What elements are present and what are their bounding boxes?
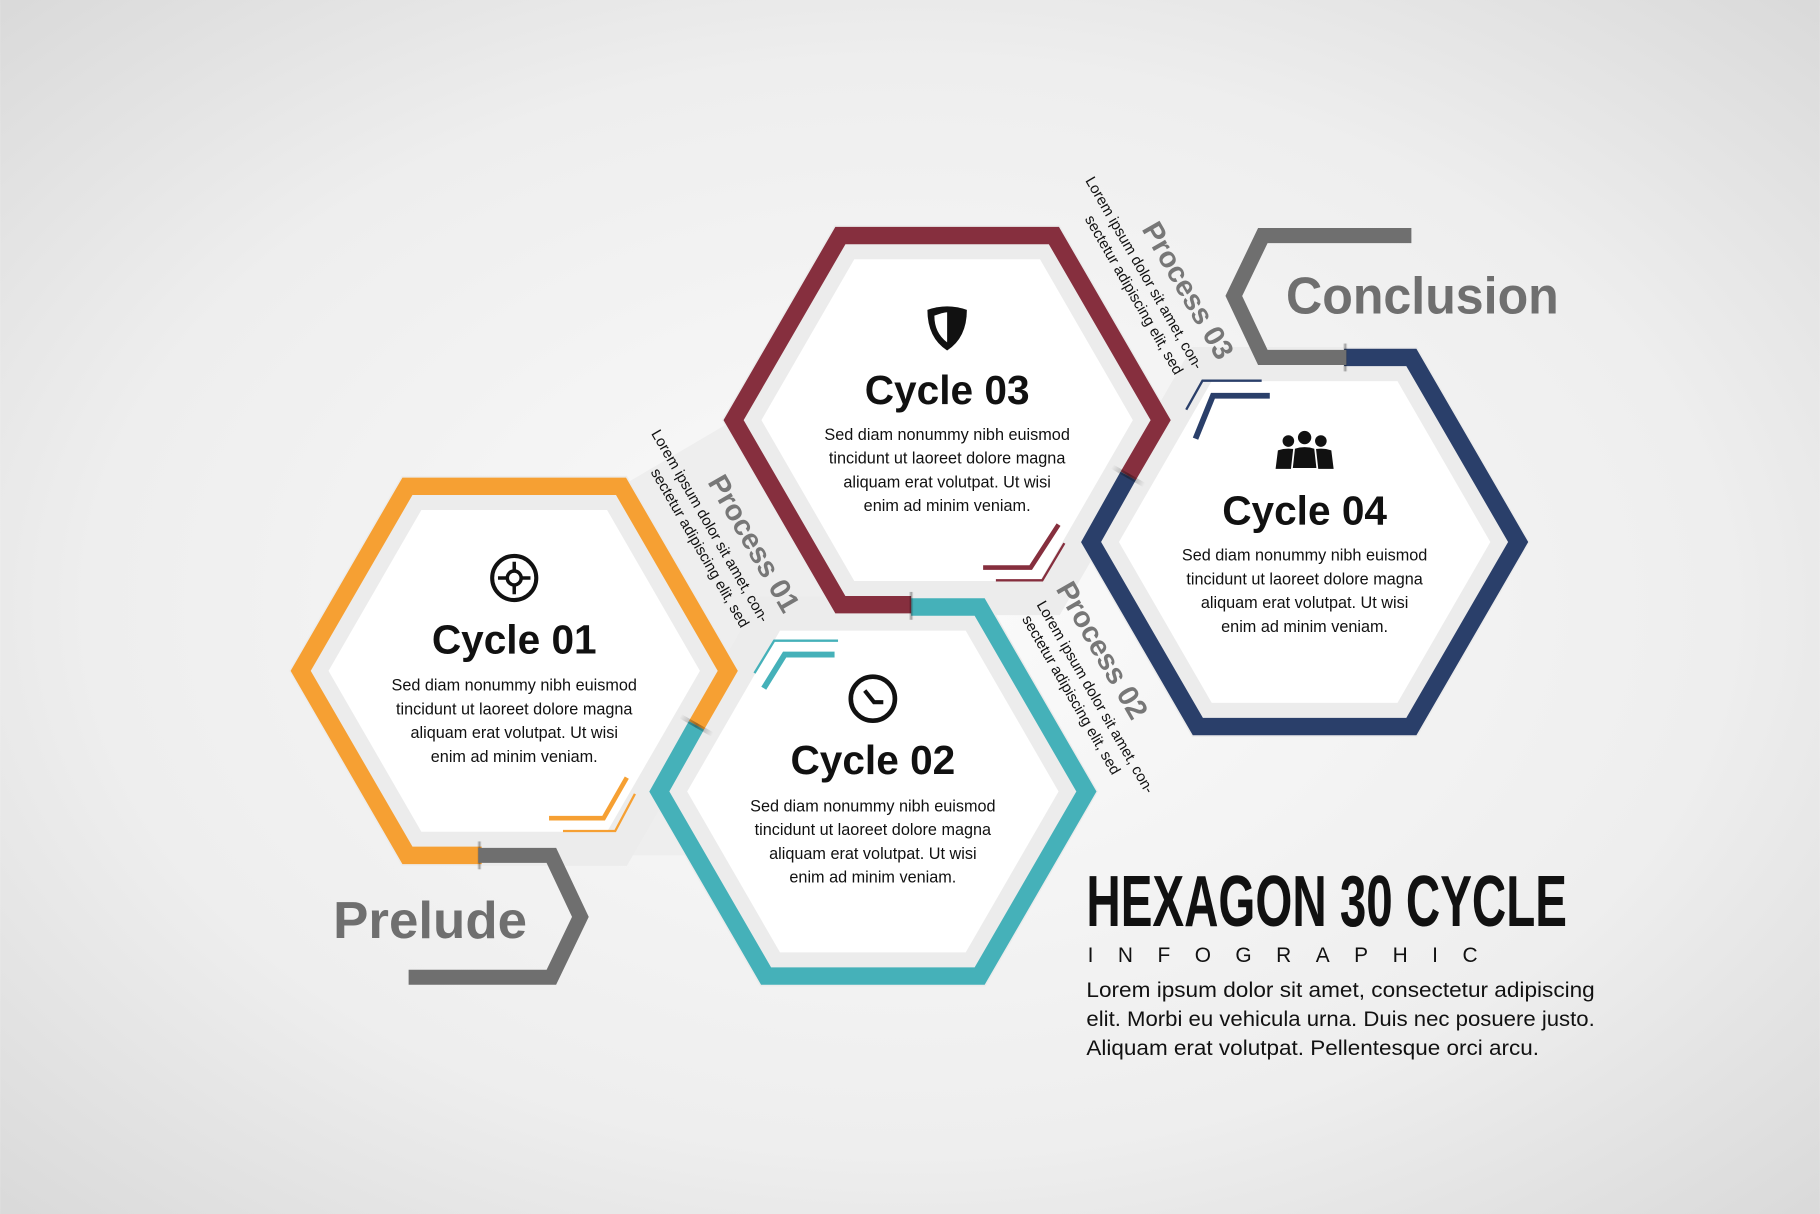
title block: elit. Morbi eu vehicula urna. Duis nec posuere justo. xyxy=(1086,1007,1595,1031)
label: process 02: sectetur adipiscing elit, sed xyxy=(1018,612,1124,778)
label: process 02: Process 02 xyxy=(1049,576,1154,725)
content: cycle 02 xyxy=(750,677,996,887)
content: cycle 01: enim ad minim veniam. xyxy=(431,748,598,766)
icon: shield xyxy=(927,306,967,351)
content: cycle 01: tincidunt ut laoreet dolore magna xyxy=(396,700,633,718)
content: cycle 03 xyxy=(824,306,1070,515)
icon: compass xyxy=(492,556,536,600)
junction shadows xyxy=(477,344,1348,869)
content: cycle 01: aliquam erat volutpat. Ut wisi xyxy=(410,724,618,742)
label: process 03: sectetur adipiscing elit, sed xyxy=(1081,212,1186,378)
bracket: prelude xyxy=(333,855,580,977)
content: cycle 04: Sed diam nonummy nibh euismod xyxy=(1182,547,1427,565)
bracket: conclusion: Conclusion xyxy=(1286,267,1559,325)
content: cycle 01: Cycle 01 xyxy=(432,616,597,662)
content: cycle 03: Sed diam nonummy nibh euismod xyxy=(824,426,1070,444)
content: cycle 02: tincidunt ut laoreet dolore magna xyxy=(755,821,992,839)
content: cycle 03: enim ad minim veniam. xyxy=(864,497,1031,515)
content: cycle 03: aliquam erat volutpat. Ut wisi xyxy=(843,473,1051,491)
content: cycle 01: Sed diam nonummy nibh euismod xyxy=(392,677,637,695)
content: cycle 04: tincidunt ut laoreet dolore magna xyxy=(1186,570,1424,588)
label: process 02 xyxy=(1014,576,1189,806)
label: process 01 xyxy=(630,409,805,639)
gap fills xyxy=(621,357,1198,855)
title block: INFOGRAPHIC xyxy=(1088,944,1478,967)
content: cycle 02: Sed diam nonummy nibh euismod xyxy=(750,797,996,815)
content: cycle 04: Cycle 04 xyxy=(1222,488,1387,534)
title block: Aliquam erat volutpat. Pellentesque orci arcu. xyxy=(1086,1036,1539,1060)
icon: people xyxy=(1276,430,1334,469)
bracket: conclusion xyxy=(1234,236,1559,357)
content: cycle 04: aliquam erat volutpat. Ut wisi xyxy=(1201,594,1408,612)
label: process 02: Lorem ipsum dolor sit amet, con- xyxy=(1033,598,1157,797)
label: process 03 xyxy=(1064,156,1239,386)
content: cycle 01 xyxy=(392,556,637,766)
hexagon stroke: cycle 03 xyxy=(734,236,1161,605)
hexagon halos xyxy=(289,225,1530,987)
icon: clock xyxy=(851,677,895,721)
content: cycle 03: Cycle 03 xyxy=(865,367,1030,413)
accent lines xyxy=(549,381,1270,831)
hexagon stroke: cycle 01 xyxy=(301,486,728,855)
label: process 01: Lorem ipsum dolor sit amet, con- xyxy=(647,427,772,625)
hexagon stroke: cycle 02 xyxy=(659,607,1086,976)
label: process 03: Process 03 xyxy=(1135,217,1239,365)
label: process 03: Lorem ipsum dolor sit amet, con- xyxy=(1081,174,1206,372)
title block: HEXAGON 30 CYCLE xyxy=(1086,862,1567,942)
content: cycle 03: tincidunt ut laoreet dolore magna xyxy=(829,450,1066,468)
title block: Lorem ipsum dolor sit amet, consectetur adipiscing xyxy=(1086,978,1595,1002)
title block xyxy=(1086,862,1595,1060)
content: cycle 02: aliquam erat volutpat. Ut wisi xyxy=(769,845,977,863)
label: process 01: Process 01 xyxy=(701,470,805,618)
content: cycle 02: enim ad minim veniam. xyxy=(789,869,956,887)
bracket: prelude: Prelude xyxy=(333,892,527,950)
hexagon stroke: cycle 04 xyxy=(1091,357,1518,727)
content: cycle 04 xyxy=(1182,430,1427,636)
content: cycle 04: enim ad minim veniam. xyxy=(1221,618,1388,636)
label: process 01: sectetur adipiscing elit, sed xyxy=(647,465,752,631)
content: cycle 02: Cycle 02 xyxy=(790,737,955,783)
